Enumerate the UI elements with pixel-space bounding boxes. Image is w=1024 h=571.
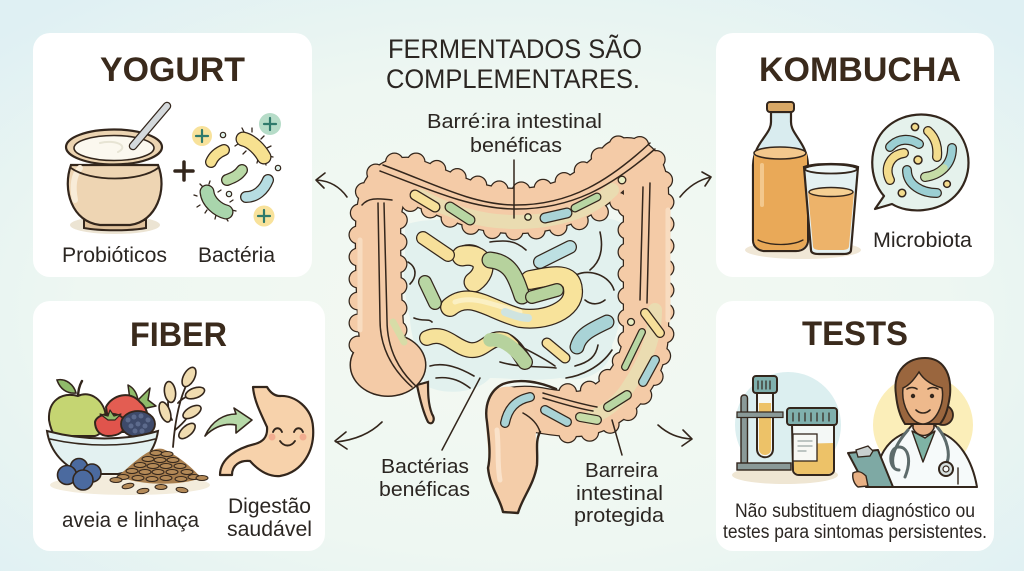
title xyxy=(386,34,642,94)
title: COMPLEMENTARES. xyxy=(386,64,640,94)
small intestine bacteria xyxy=(423,238,570,358)
label: Bactérias benéficas xyxy=(379,378,480,501)
colon scalloped outline xyxy=(358,143,665,434)
panel: kombucha xyxy=(716,33,994,277)
icon: flaxseed pile xyxy=(110,449,208,495)
label: aveia e linhaça: aveia e linhaça xyxy=(62,509,199,532)
icon: smiling stomach xyxy=(220,387,313,476)
label: Digestão saudável xyxy=(227,495,312,541)
small intestine xyxy=(404,218,625,392)
label: Barreira intestinal protegida: intestinal xyxy=(576,482,663,505)
icon: yogurt pot xyxy=(66,106,167,234)
label: Bactérias benéficas: benéficas xyxy=(379,478,470,501)
icon: fruit bowl xyxy=(47,380,210,495)
title: FERMENTADOS SÃO xyxy=(388,34,642,64)
icon: lab sample equipment xyxy=(732,372,841,484)
heading: kombucha: KOMBUCHA xyxy=(759,51,961,89)
label: Bactéria: Bactéria xyxy=(198,244,275,267)
label: Digestão saudável: saudável xyxy=(227,518,312,541)
label: Probióticos: Probióticos xyxy=(62,244,167,267)
icon: oat sprig xyxy=(157,365,206,447)
panel: yogurt xyxy=(33,33,312,277)
caption: tests disclaimer: Não substituem diagnóstico ou xyxy=(735,501,975,522)
icon: kombucha bottle and glass xyxy=(745,102,861,259)
heading: tests: TESTS xyxy=(802,315,908,353)
label: Barreira intestinal protegida: protegida xyxy=(574,504,665,527)
panel: tests xyxy=(716,301,994,551)
heading: yogurt: YOGURT xyxy=(100,51,245,89)
label: Barreira intestinal benéficas (top): Barré:ira intestinal xyxy=(427,110,602,133)
icon: bacteria cluster xyxy=(192,113,281,226)
caption: tests disclaimer xyxy=(723,501,987,543)
colon xyxy=(350,143,668,513)
icon: green arrow xyxy=(205,408,252,436)
icon: doctor xyxy=(848,358,977,487)
arrow: to yogurt xyxy=(316,173,347,197)
colon lining tint xyxy=(420,190,655,418)
rectum xyxy=(486,387,538,513)
caption: tests disclaimer: testes para sintomas persistentes. xyxy=(723,522,987,543)
colon bacteria xyxy=(415,176,660,423)
icon: microbiota speech bubble xyxy=(872,114,968,210)
small intestine loops xyxy=(427,255,607,362)
arrow: to fiber xyxy=(335,422,382,449)
colon inner lines xyxy=(362,143,655,432)
arrow: to kombucha xyxy=(680,172,711,197)
icon: plus sign xyxy=(175,162,193,180)
label: Bactérias benéficas: Bactérias xyxy=(381,455,469,478)
panel: fiber xyxy=(33,301,325,551)
label: Microbiota: Microbiota xyxy=(873,229,972,252)
arrow: to tests xyxy=(658,425,692,446)
label: Digestão saudável: Digestão xyxy=(228,495,311,518)
label: Barreira intestinal benéficas (top) xyxy=(427,110,602,218)
label: Barreira intestinal protegida xyxy=(574,420,665,527)
heading: fiber: FIBER xyxy=(130,316,227,354)
label: Barreira intestinal benéficas (top): benéficas xyxy=(470,134,562,157)
central diagram: intestine xyxy=(350,110,668,527)
label: Barreira intestinal protegida: Barreira xyxy=(585,459,659,482)
